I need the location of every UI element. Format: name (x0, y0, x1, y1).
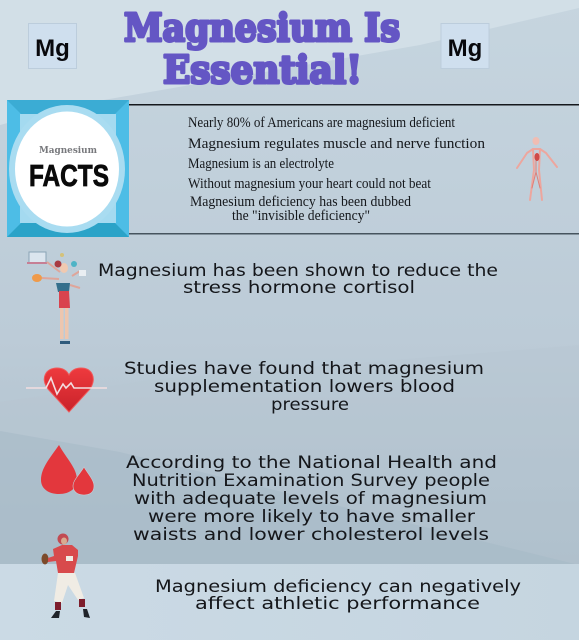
survey text: Nutrition Examination Survey people (132, 471, 490, 491)
blood pressure text: pressure (271, 395, 349, 415)
facts list (188, 115, 485, 224)
facts list: Without magnesium your heart could not beat (188, 176, 432, 192)
facts badge: FACTS (29, 158, 109, 193)
survey text: waists and lower cholesterol levels (133, 525, 489, 545)
icon: circulatory body (517, 137, 557, 200)
facts list: Magnesium deficiency has been dubbed (190, 194, 411, 210)
element badge: left Mg: Mg (35, 35, 70, 62)
athletic text: affect athletic performance (195, 594, 480, 614)
element badge: right Mg (441, 24, 489, 68)
facts list: Magnesium is an electrolyte (188, 156, 334, 172)
blood pressure text: supplementation lowers blood (154, 377, 455, 397)
stress text: Magnesium has been shown to reduce the (98, 261, 498, 281)
icon: blood drops (41, 445, 94, 495)
icon: football player (42, 534, 90, 618)
survey text: According to the National Health and (126, 453, 497, 473)
icon: multitasking woman (27, 252, 86, 344)
blood pressure text (124, 359, 484, 415)
stress text (98, 261, 498, 298)
facts list: Nearly 80% of Americans are magnesium deficient (188, 115, 456, 131)
element badge: left Mg (28, 24, 76, 68)
title (124, 5, 400, 92)
facts list: Magnesium regulates muscle and nerve function (188, 136, 485, 152)
survey text (126, 453, 497, 545)
facts badge (7, 100, 129, 237)
blood pressure text: Studies have found that magnesium (124, 359, 484, 379)
title: Essential! (163, 47, 362, 92)
icon: heart with pulse (26, 368, 107, 412)
survey text: were more likely to have smaller (148, 507, 475, 527)
athletic text: Magnesium deficiency can negatively (155, 577, 521, 597)
stress text: stress hormone cortisol (183, 278, 415, 298)
athletic text (155, 577, 521, 614)
facts badge: Magnesium (39, 146, 97, 156)
facts panel rules (129, 104, 579, 234)
survey text: with adequate levels of magnesium (134, 489, 487, 509)
facts list: the "invisible deficiency" (232, 208, 370, 224)
title: Magnesium Is (124, 5, 400, 50)
element badge: right Mg: Mg (448, 35, 482, 62)
